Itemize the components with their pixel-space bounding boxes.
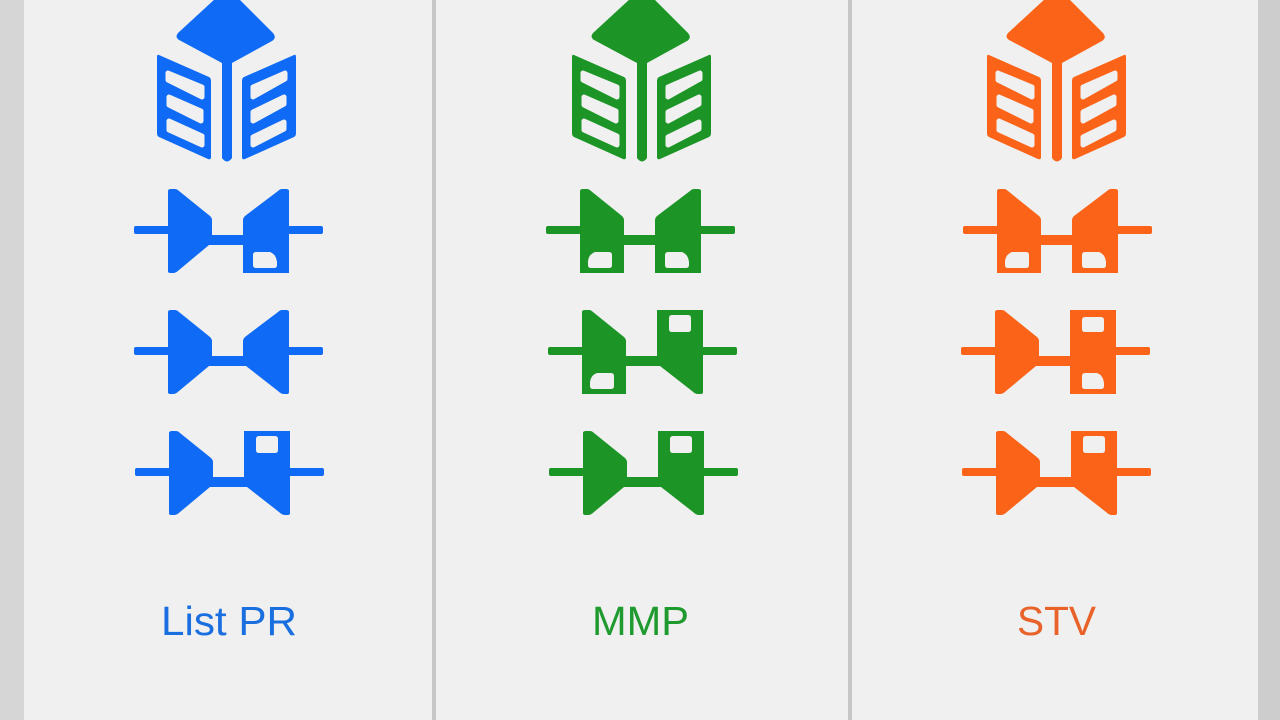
icon: green connector row 2: [548, 310, 737, 394]
icon: orange connector row 2: [961, 310, 1150, 394]
panel: MMP: [436, 0, 848, 720]
label: List PR: List PR: [161, 598, 297, 644]
label: MMP: MMP: [592, 598, 689, 644]
icon: green connector row 3: [549, 431, 738, 515]
icon: orange connector row 1: [963, 189, 1152, 273]
panel: List PR: [24, 0, 432, 720]
right background edge: [1258, 0, 1280, 720]
icon: green connector row 1: [546, 189, 735, 273]
panel: STV: [852, 0, 1258, 720]
icon: orange connector row 3: [962, 431, 1151, 515]
label: STV: STV: [1017, 598, 1097, 644]
icon: green open book with roof: [572, 0, 711, 162]
icon: blue connector row 2: [134, 310, 323, 394]
icon: blue open book with roof: [157, 0, 296, 162]
icon: blue connector row 1: [134, 189, 323, 273]
icon: orange open book with roof: [987, 0, 1126, 162]
icon: blue connector row 3: [135, 431, 324, 515]
